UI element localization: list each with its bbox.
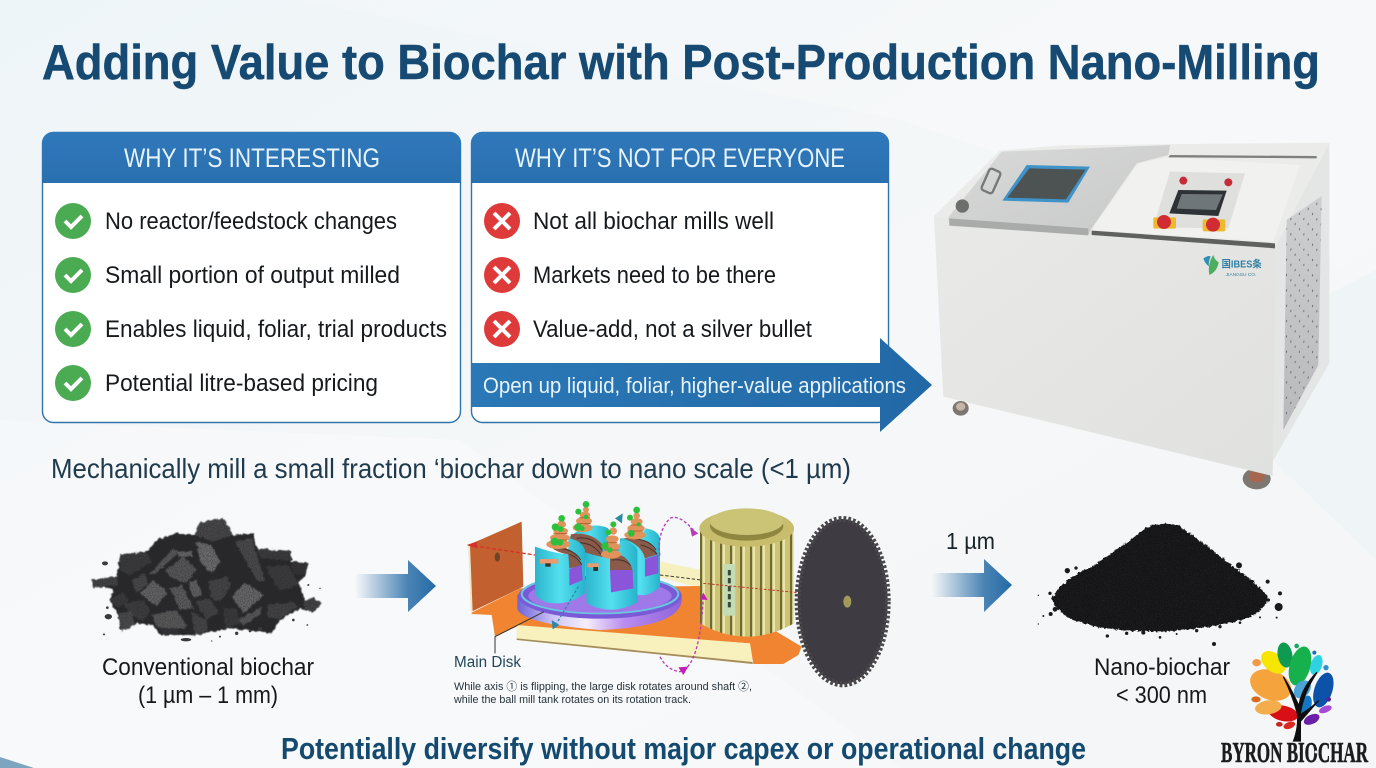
image: nano-biochar powder pile xyxy=(1038,524,1283,646)
motor xyxy=(699,508,812,637)
label: conventional biochar: Conventional biochar xyxy=(102,654,314,681)
caption: mill explanation: While axis ① is flipping, the large disk rotates around shaft ②, xyxy=(454,680,752,693)
label: nano-biochar: Nano-biochar xyxy=(1094,654,1230,681)
machine logo xyxy=(1203,255,1262,277)
machine logo: JIANGSU CO. xyxy=(1226,272,1256,277)
list item: no reactor changes xyxy=(55,203,397,239)
gear disk xyxy=(798,519,888,684)
leader line xyxy=(495,612,544,653)
purple disk xyxy=(517,573,682,630)
machine photo: nano mill xyxy=(934,143,1329,489)
list item: enables products: Enables liquid, foliar, trial products xyxy=(105,316,447,343)
tank: back centre xyxy=(570,526,608,575)
subtitle: Mechanically mill a small fraction ‘biochar down to nano scale (<1 µm) xyxy=(51,453,851,484)
logo: byron biochar tree xyxy=(1221,641,1368,768)
list item: small portion xyxy=(55,257,400,293)
tank: right xyxy=(620,528,660,595)
panel header: why it's interesting: WHY IT’S INTERESTING xyxy=(124,143,380,173)
red axis line and teal arrows xyxy=(467,513,702,629)
list item: markets xyxy=(484,257,776,293)
charcoal dust xyxy=(102,561,321,642)
base plate xyxy=(472,562,802,664)
arrow banner: applications: Open up liquid, foliar, higher-value applications xyxy=(483,373,906,398)
vent panel xyxy=(1283,196,1322,430)
wheels xyxy=(953,401,1271,489)
list item: value-add: Value-add, not a silver bullet xyxy=(533,316,812,343)
list item: litre pricing: Potential litre-based pricing xyxy=(105,370,378,397)
machine logo: 国IBES条 xyxy=(1222,257,1262,270)
panel: why it's interesting xyxy=(42,132,461,422)
label: conventional biochar: (1 µm – 1 mm) xyxy=(138,682,278,709)
label: conventional biochar xyxy=(102,654,314,709)
powder specks xyxy=(1038,562,1283,646)
tank: front left xyxy=(535,538,585,603)
label: nano-biochar: < 300 nm xyxy=(1116,682,1207,709)
list item: not all mills well xyxy=(484,203,774,239)
tanks xyxy=(535,501,660,610)
arrow banner: applications xyxy=(471,338,932,432)
diagram: planetary ball mill xyxy=(467,501,888,684)
list item: enables products xyxy=(55,311,447,347)
arrow: to nano-biochar xyxy=(932,559,1012,612)
label: 1 µm: 1 µm xyxy=(946,528,995,554)
arrow: to mill xyxy=(355,560,436,612)
caption: mill explanation: while the ball mill tank rotates on its rotation track. xyxy=(453,694,691,706)
panel header: why it's interesting xyxy=(42,132,461,183)
lid with window xyxy=(948,145,1170,235)
list item: markets: Markets need to be there xyxy=(533,262,776,289)
gear stacks xyxy=(546,501,646,559)
list item: not all mills well: Not all biochar mills well xyxy=(533,208,774,235)
tree petals xyxy=(1245,641,1337,731)
tank: front centre xyxy=(585,540,637,610)
panel: why it's not for everyone xyxy=(471,132,889,422)
image: conventional biochar pile xyxy=(92,518,322,642)
list item: litre pricing xyxy=(55,365,378,401)
list item: small portion: Small portion of output milled xyxy=(105,262,400,289)
back plate xyxy=(468,522,523,612)
label: nano-biochar xyxy=(1094,654,1230,709)
takeaway: Potentially diversify without major capex or operational change xyxy=(281,731,1086,766)
list item: no reactor changes: No reactor/feedstock changes xyxy=(105,208,397,235)
caption: mill explanation xyxy=(453,680,752,706)
panel header: why it's not for everyone xyxy=(471,132,889,183)
tree trunk xyxy=(1283,672,1319,742)
list item: value-add xyxy=(484,311,812,347)
label: main disk: Main Disk xyxy=(454,654,521,671)
panel header: why it's not for everyone: WHY IT’S NOT FOR EVERYONE xyxy=(515,143,845,173)
control panel xyxy=(1153,172,1245,232)
rotation loop xyxy=(659,517,708,675)
